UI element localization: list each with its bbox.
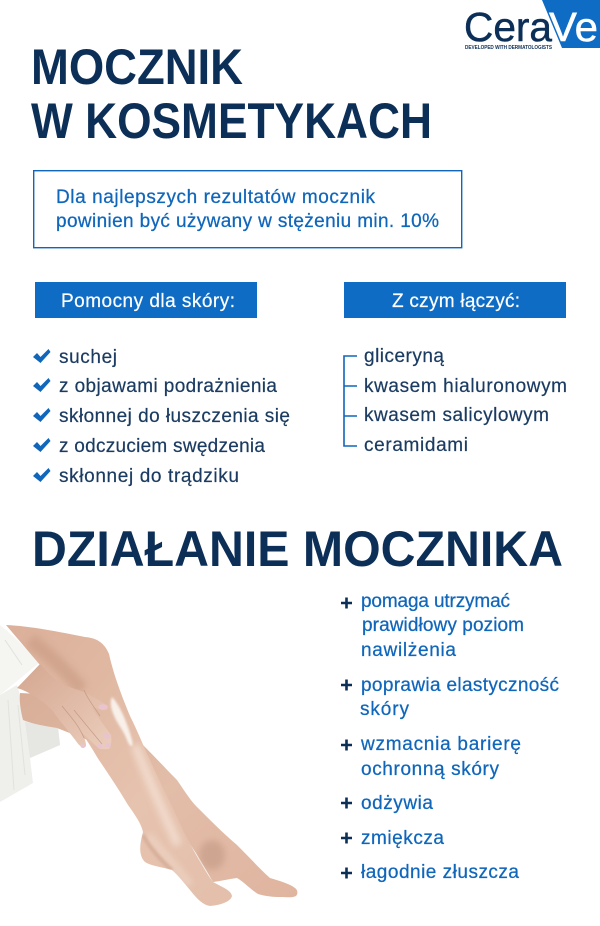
benefits list: nawilżenia: [361, 640, 456, 661]
benefits list: łagodnie złuszcza: [361, 862, 519, 883]
cloth: [0, 625, 60, 802]
front leg shading: [30, 640, 190, 885]
logo: CeraVe: Cera: [464, 4, 552, 50]
bracket list: ingredients to combine: gliceryną: [364, 346, 444, 367]
checklist: skin types: [33, 347, 290, 487]
bracket list: ingredients to combine: kwasem salicylowym: [364, 405, 549, 426]
title: [31, 39, 432, 149]
heading button: helpful for skin: [35, 282, 257, 318]
benefits list: pomaga utrzymać: [361, 591, 510, 612]
heading button: combine with: Z czym łączyć:: [392, 291, 520, 312]
heading button: helpful for skin: Pomocny dla skóry:: [61, 291, 235, 312]
benefits list: skóry: [360, 699, 410, 720]
callout: recommended concentration: [34, 171, 462, 248]
plus icons: [341, 598, 352, 878]
benefits list: zmiękcza: [361, 828, 444, 849]
logo: CeraVe: [464, 0, 600, 51]
benefits list: prawidłowy poziom: [362, 615, 524, 636]
benefits list: poprawia elastyczność: [361, 675, 559, 696]
back ankle shadow: [199, 840, 225, 870]
section heading: DZIAŁANIE MOCZNIKA: [32, 521, 563, 577]
cream streak: [111, 697, 133, 746]
title: MOCZNIK: [31, 39, 243, 95]
checklist: skin types: skłonnej do łuszczenia się: [59, 406, 290, 427]
photo: legs with cream: [0, 625, 297, 906]
title: W KOSMETYKACH: [31, 93, 432, 149]
checklist: skin types: z objawami podrażnienia: [59, 376, 277, 397]
checklist: skin types: z odczuciem swędzenia: [59, 436, 265, 457]
front leg: [6, 625, 232, 906]
benefits list: odżywia: [361, 793, 433, 814]
bracket list: ingredients to combine: ceramidami: [364, 435, 468, 456]
finger creases: [62, 690, 102, 744]
back leg: [20, 693, 297, 897]
checklist: skin types: skłonnej do trądziku: [59, 466, 239, 487]
heading button: combine with: [344, 282, 566, 318]
nails: [80, 704, 111, 748]
checklist: skin types: suchej: [59, 347, 117, 368]
benefits list: ochronną skóry: [361, 759, 500, 780]
bracket list: ingredients to combine: [344, 346, 567, 456]
logo: CeraVe: Ve: [549, 4, 598, 50]
hand: [17, 664, 111, 749]
benefits list: [341, 591, 559, 883]
logo: CeraVe: DEVELOPED WITH DERMATOLOGISTS: [465, 45, 552, 51]
bracket list: ingredients to combine: kwasem hialuronowym: [364, 376, 567, 397]
callout: recommended concentration: powinien być używany w stężeniu min. 10%: [56, 211, 439, 232]
benefits list: wzmacnia barierę: [360, 734, 521, 755]
callout: recommended concentration: Dla najlepszych rezultatów mocznik: [56, 187, 376, 208]
